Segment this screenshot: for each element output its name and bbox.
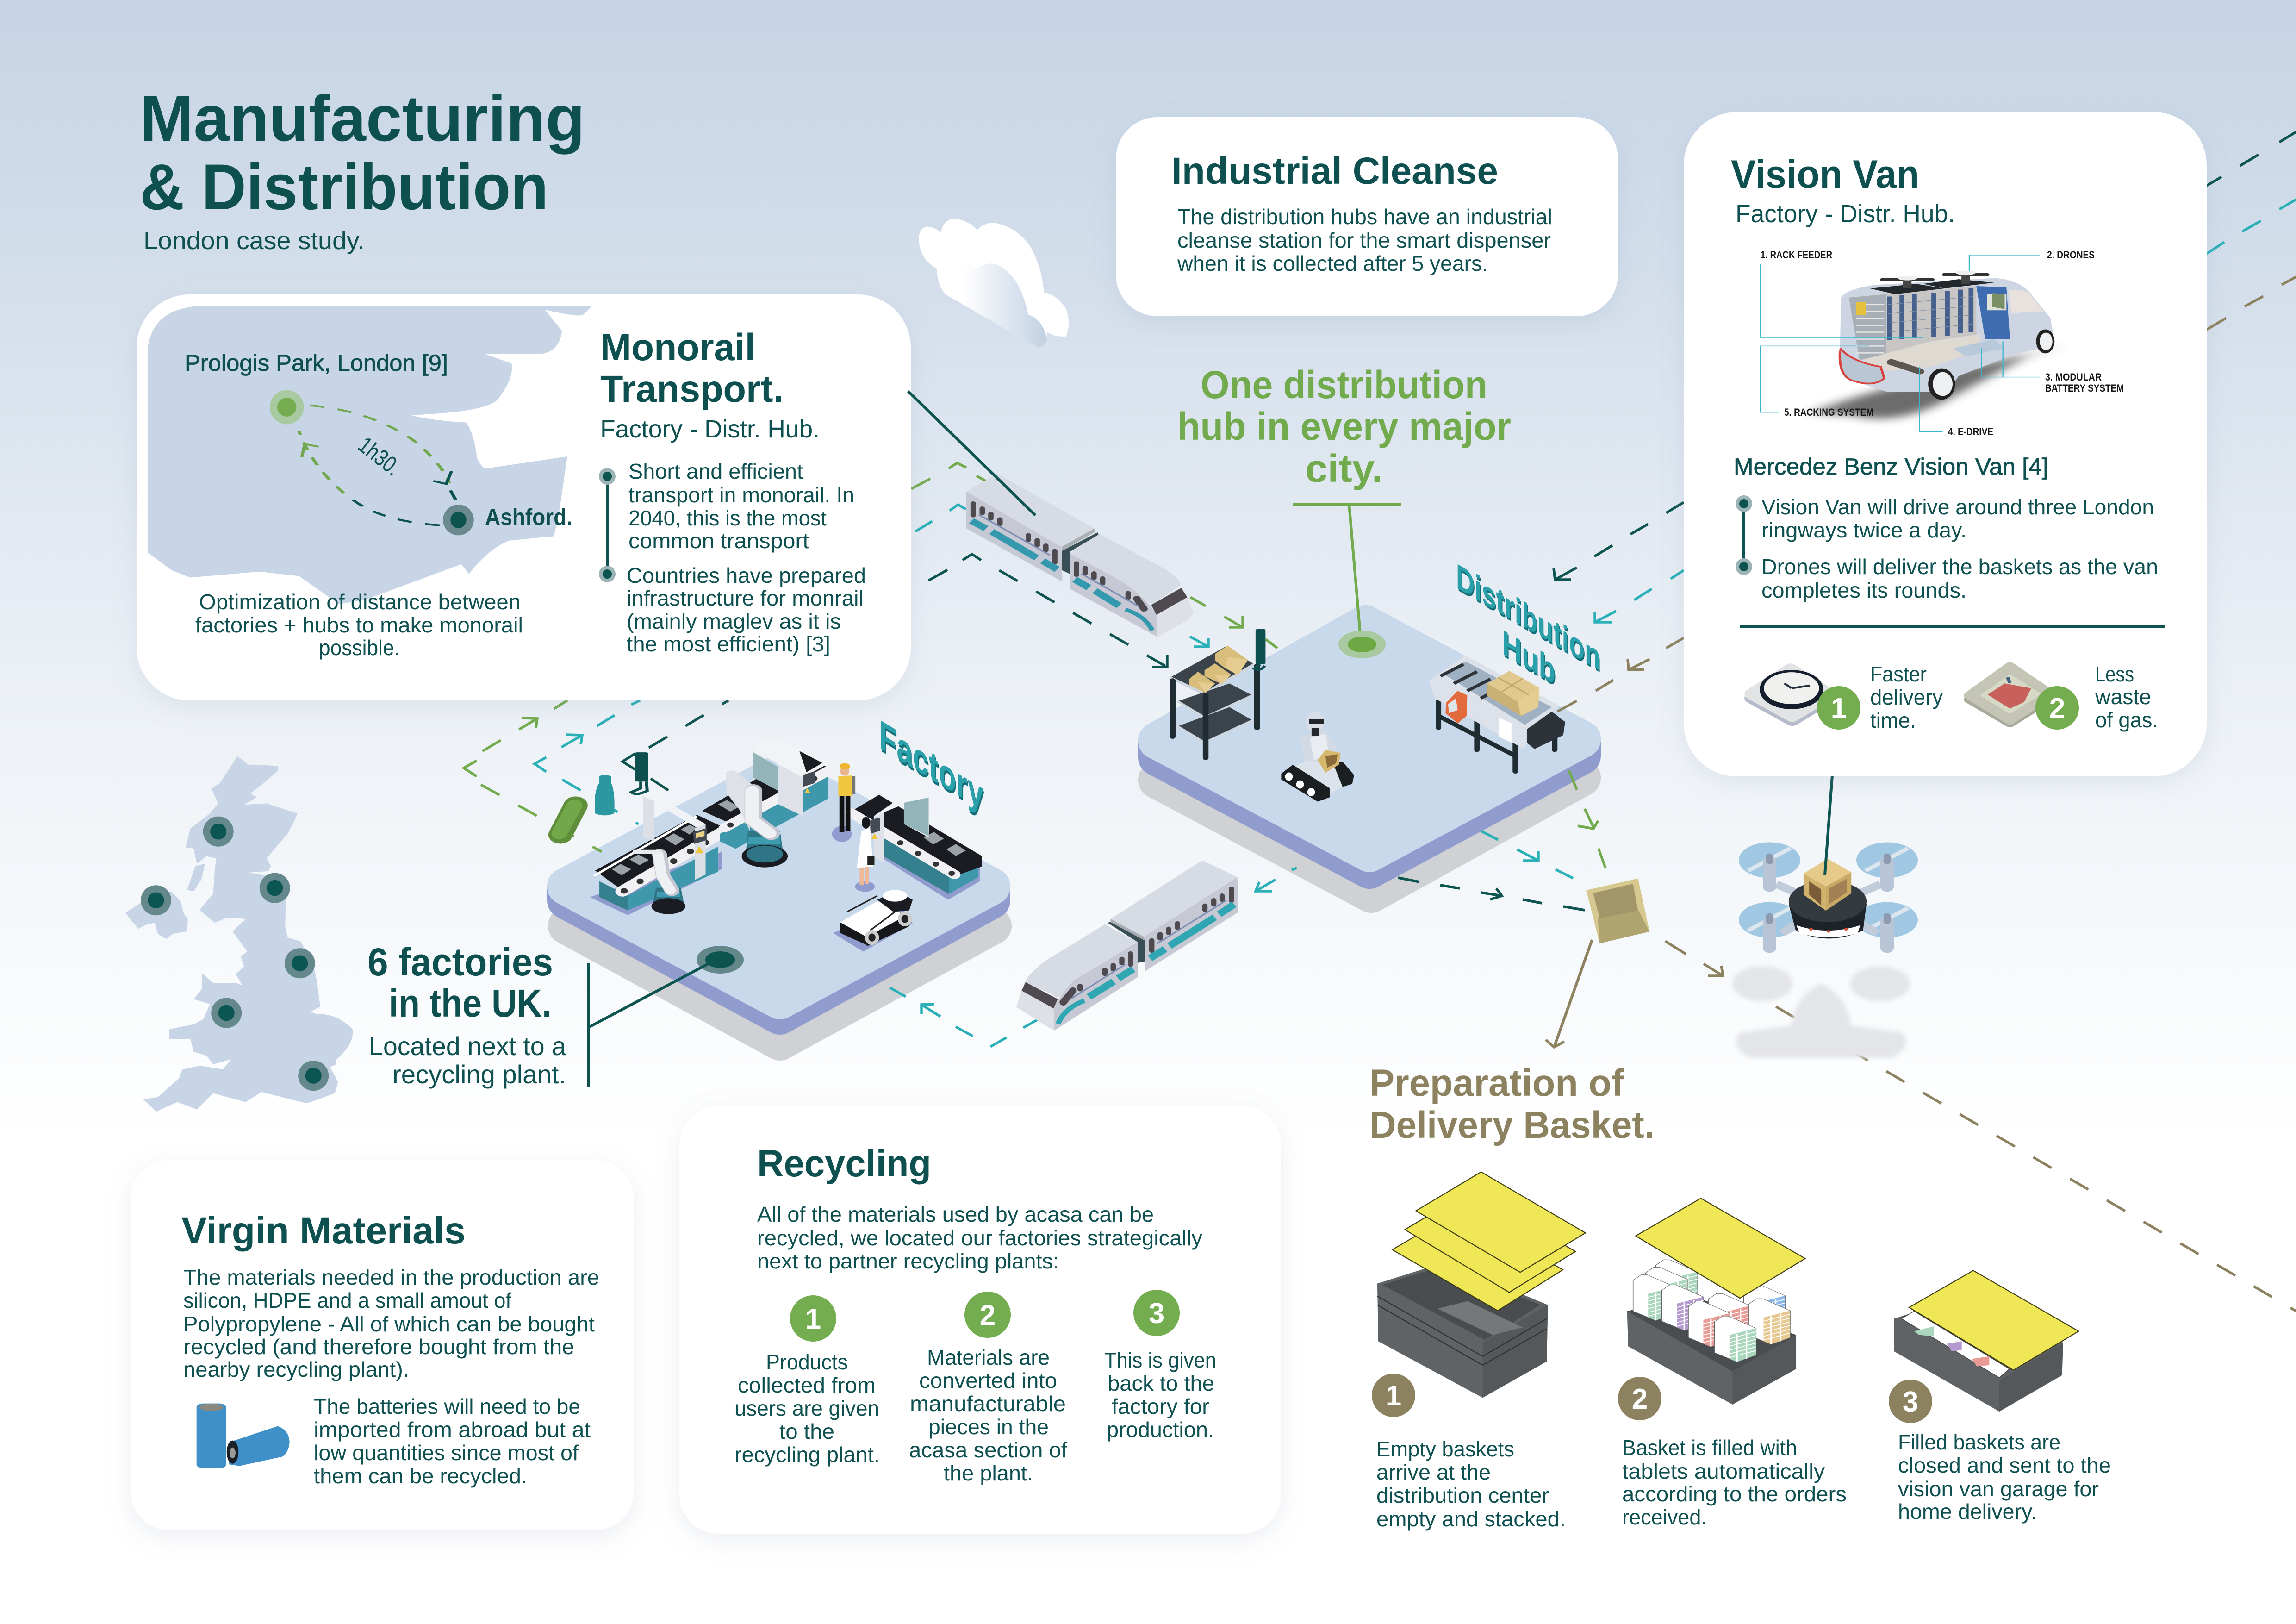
- virgin materials text: silicon, HDPE and a small amout of: [183, 1288, 511, 1312]
- van diagram labels: [1761, 249, 2124, 437]
- clock and fuel icons: [1751, 666, 2051, 723]
- distribution hub label: Hub: [1502, 622, 1556, 693]
- preparation heading: Preparation of: [1369, 1062, 1624, 1104]
- monorail heading: Monorail: [600, 326, 755, 369]
- step 1 text: Products: [766, 1350, 848, 1374]
- van diagram labels: BATTERY SYSTEM: [2045, 382, 2124, 394]
- industrial cleanse text: cleanse station for the smart dispenser: [1177, 228, 1551, 252]
- van diagram labels: 3. MODULAR: [2045, 371, 2102, 383]
- step 3 text: factory for: [1112, 1394, 1209, 1418]
- preparation heading: [1369, 1062, 1655, 1146]
- basket step 3 text: [1898, 1430, 2111, 1524]
- hub platform: [1157, 624, 1582, 894]
- factories text: recycling plant.: [392, 1060, 566, 1089]
- van bullet text: Vision Van will drive around three London: [1761, 495, 2154, 519]
- panel: recycling: [679, 1106, 1281, 1534]
- upper monorail train: [966, 474, 1194, 637]
- panel: industrial cleanse: [1116, 117, 1618, 316]
- batteries image: [197, 1404, 290, 1468]
- basket 2: filled with tablets: [1627, 1198, 1805, 1405]
- basket step 1 text: arrive at the: [1376, 1460, 1491, 1484]
- monorail subheading: Factory - Distr. Hub.: [600, 415, 820, 443]
- factory platform: [566, 772, 993, 1042]
- monorail bullet text: transport in monorail. In: [628, 483, 854, 507]
- industrial cleanse heading: Industrial Cleanse: [1171, 150, 1498, 192]
- step 3 badge: [1133, 1290, 1180, 1336]
- monorail bullet line: [599, 468, 616, 582]
- conveyor line with gate, right: [851, 784, 982, 900]
- monorail bullet text: Short and efficient: [628, 459, 803, 483]
- benefit: faster delivery: Faster: [1870, 662, 1927, 686]
- benefit: faster delivery: delivery: [1870, 685, 1943, 709]
- basket 3: closed: [1894, 1270, 2078, 1412]
- basket step badge 3: [1889, 1380, 1932, 1423]
- step 2 badge: 2: [980, 1299, 996, 1331]
- factories heading: [367, 940, 553, 1025]
- monorail leader line: [908, 391, 1035, 515]
- monorail heading: [600, 326, 784, 410]
- one hub per city heading: One distribution: [1201, 363, 1487, 406]
- van bullet text: Drones will deliver the baskets as the van: [1761, 555, 2158, 579]
- basket step badge 1: [1372, 1374, 1415, 1417]
- monorail bullet text: the most efficient) [3]: [627, 632, 830, 656]
- monorail bullet text: [627, 459, 866, 656]
- factories text: Located next to a: [369, 1031, 566, 1061]
- virgin materials text: nearby recycling plant).: [183, 1357, 409, 1381]
- conveyor line with robot arms, left: [590, 792, 725, 915]
- basket at end of hub: [1586, 879, 1649, 943]
- step 2 text: [909, 1345, 1067, 1485]
- number badge 2: 2: [2049, 693, 2065, 725]
- subtitle: London case study.: [143, 227, 365, 255]
- vision van cutaway diagram: [1761, 255, 2065, 431]
- virgin materials text: The materials needed in the production are: [183, 1265, 599, 1289]
- basket step 3 text: Filled baskets are: [1898, 1430, 2060, 1454]
- step 1 text: [734, 1350, 880, 1467]
- material bottle: [595, 775, 615, 815]
- cloud: [919, 219, 1069, 347]
- van to drone leader: [1825, 775, 1832, 875]
- van bullet line: [1736, 495, 1752, 575]
- lower monorail train: [1016, 860, 1238, 1031]
- preparation heading: Delivery Basket.: [1369, 1104, 1655, 1146]
- factory label: Factory: [879, 711, 983, 819]
- batteries text: low quantities since most of: [314, 1441, 579, 1465]
- recycling intro: All of the materials used by acasa can be: [757, 1202, 1154, 1226]
- benefit: less gas: Less: [2095, 662, 2134, 686]
- map caption: [195, 590, 523, 660]
- number badge 2: [2035, 686, 2079, 730]
- industrial cleanse text: The distribution hubs have an industrial: [1177, 205, 1552, 229]
- basket step 2 text: according to the orders: [1622, 1482, 1847, 1506]
- route lines: monorail loop and deliveries: [464, 132, 2296, 1311]
- basket step badge 2: [1618, 1377, 1661, 1420]
- van diagram labels: 5. RACKING SYSTEM: [1784, 406, 1873, 418]
- map label: duration: 1h30.: [353, 432, 406, 481]
- map caption: Optimization of distance between: [199, 590, 521, 614]
- monorail bullet text: common transport: [628, 529, 809, 553]
- industrial cleanse text: when it is collected after 5 years.: [1177, 251, 1488, 275]
- factories text: [369, 1031, 566, 1089]
- basket leader arrow: [1546, 940, 1592, 1047]
- basket step badge 3: 3: [1903, 1386, 1918, 1418]
- one hub per city heading: [1177, 363, 1511, 490]
- monorail heading: Transport.: [600, 368, 784, 410]
- map label: Prologis Park: Prologis Park, London [9]: [185, 350, 448, 376]
- drone with parcel: [1739, 843, 1918, 948]
- step 1 text: users are given: [734, 1396, 879, 1420]
- virgin materials heading: Virgin Materials: [181, 1210, 466, 1252]
- map caption: factories + hubs to make monorail: [195, 613, 523, 637]
- factory marker and leader: [589, 946, 744, 1087]
- virgin materials text: recycled (and therefore bought from the: [183, 1335, 574, 1359]
- title: & Distribution: [140, 150, 548, 223]
- step 3 text: back to the: [1108, 1371, 1214, 1395]
- basket step 3 text: closed and sent to the: [1898, 1453, 2111, 1477]
- worker in yellow vest: [832, 763, 855, 842]
- drone shadow: [1732, 966, 1910, 1058]
- step 2 text: manufacturable: [910, 1392, 1066, 1416]
- distribution hub label: Distribution: [1456, 556, 1600, 679]
- one hub per city heading: hub in every major: [1177, 405, 1511, 448]
- industrial cleanse text: [1177, 205, 1552, 275]
- one hub per city heading: city.: [1305, 447, 1383, 490]
- benefit: less gas: of gas.: [2095, 708, 2158, 732]
- van diagram labels: 4. E-DRIVE: [1948, 426, 1993, 437]
- map of south-east England: [148, 306, 592, 604]
- step 1 text: recycling plant.: [734, 1443, 880, 1467]
- vision van subheading: Factory - Distr. Hub.: [1736, 200, 1955, 228]
- step 1 text: to the: [779, 1419, 834, 1443]
- basket step 2 text: tablets automatically: [1622, 1459, 1825, 1483]
- recycling intro: next to partner recycling plants:: [757, 1249, 1059, 1273]
- van model heading: Mercedez Benz Vision Van [4]: [1734, 454, 2048, 480]
- hub marker and leader: [1293, 504, 1401, 658]
- recycling heading: Recycling: [757, 1143, 931, 1185]
- basket step 1 text: [1376, 1437, 1566, 1531]
- robot gripper: [631, 752, 648, 794]
- monorail bullet text: Countries have prepared: [627, 563, 866, 587]
- monorail bullet text: (mainly maglev as it is: [627, 609, 841, 633]
- van bullet text: completes its rounds.: [1761, 578, 1966, 602]
- step 2 text: the plant.: [944, 1461, 1033, 1485]
- monorail bullet text: 2040, this is the most: [628, 506, 827, 530]
- material capsule: [560, 806, 576, 835]
- benefit: faster delivery: time.: [1870, 708, 1916, 732]
- step 2 text: acasa section of: [909, 1438, 1067, 1462]
- basket step 2 text: Basket is filled with: [1622, 1436, 1797, 1460]
- van bullet text: ringways twice a day.: [1761, 518, 1966, 542]
- step 2 text: pieces in the: [928, 1415, 1049, 1439]
- virgin materials text: [183, 1265, 599, 1381]
- virgin materials text: Polypropylene - All of which can be bought: [183, 1312, 595, 1336]
- step 3 badge: 3: [1149, 1298, 1164, 1330]
- benefit: less gas: [2095, 662, 2158, 732]
- map label: Ashford: Ashford.: [485, 504, 572, 530]
- step 3 text: This is given: [1104, 1348, 1216, 1372]
- UK map with factory markers: [125, 756, 353, 1112]
- delivery baskets illustrations: [1377, 1172, 2078, 1412]
- benefit: faster delivery: [1870, 662, 1943, 732]
- basket step 3 text: vision van garage for: [1898, 1477, 2099, 1501]
- batteries text: imported from abroad but at: [314, 1418, 591, 1442]
- divider: [1740, 625, 2165, 628]
- factories heading: in the UK.: [389, 981, 552, 1025]
- step 1 badge: [790, 1295, 836, 1342]
- robot on tracks: [1281, 712, 1354, 802]
- basket 1: stacked and empty: [1377, 1172, 1586, 1398]
- step 3 text: [1104, 1348, 1216, 1442]
- basket step 1 text: Empty baskets: [1376, 1437, 1514, 1461]
- map caption: possible.: [319, 636, 400, 660]
- panel: vision van: [1684, 112, 2207, 776]
- basket step 3 text: home delivery.: [1898, 1499, 2037, 1524]
- storage shelf with boxes: [1170, 646, 1257, 758]
- sorting conveyor: [1429, 656, 1565, 772]
- van diagram labels: 1. RACK FEEDER: [1761, 249, 1832, 261]
- recycling intro: recycled, we located our factories strategically: [757, 1226, 1202, 1250]
- factory scene: machines, robots, people: [560, 738, 982, 952]
- number badge 1: 1: [1831, 693, 1847, 725]
- step 1 text: collected from: [738, 1373, 876, 1397]
- title: Manufacturing: [140, 82, 585, 155]
- panel: virgin materials: [131, 1160, 634, 1530]
- basket step 2 text: [1622, 1436, 1847, 1529]
- factories heading: 6 factories: [367, 940, 553, 984]
- step 2 text: Materials are: [927, 1345, 1050, 1369]
- recycling intro: [757, 1202, 1202, 1273]
- scientist in white coat: [855, 817, 875, 892]
- van bullet text: [1761, 495, 2158, 602]
- step 2 badge: [964, 1292, 1011, 1338]
- number badge 1: [1817, 686, 1860, 730]
- basket step 1 text: empty and stacked.: [1376, 1507, 1566, 1531]
- panel: monorail transport: [137, 294, 911, 700]
- batteries text: [314, 1394, 591, 1488]
- step 2 text: converted into: [919, 1368, 1057, 1393]
- conveyor line with gate, centre: [702, 738, 829, 868]
- autonomous cart: [833, 890, 913, 952]
- step 3 text: production.: [1107, 1418, 1214, 1442]
- basket step badge 2: 2: [1632, 1383, 1648, 1415]
- basket step badge 1: 1: [1386, 1380, 1401, 1412]
- van diagram labels: 2. DRONES: [2047, 249, 2095, 261]
- title: [140, 82, 585, 223]
- batteries text: The batteries will need to be: [314, 1394, 580, 1418]
- step 1 badge: 1: [805, 1303, 821, 1335]
- vision van heading: Vision Van: [1731, 152, 1919, 197]
- batteries text: them can be recycled.: [314, 1464, 527, 1488]
- benefit: less gas: waste: [2095, 685, 2151, 709]
- gripper on shelf: [1254, 629, 1265, 670]
- basket step 2 text: received.: [1622, 1505, 1707, 1529]
- monorail bullet text: infrastructure for monrail: [627, 586, 864, 610]
- distribution hub label: [1456, 556, 1600, 693]
- hub scene: shelf, robot, conveyor: [1170, 629, 1649, 943]
- basket step 1 text: distribution center: [1376, 1483, 1549, 1507]
